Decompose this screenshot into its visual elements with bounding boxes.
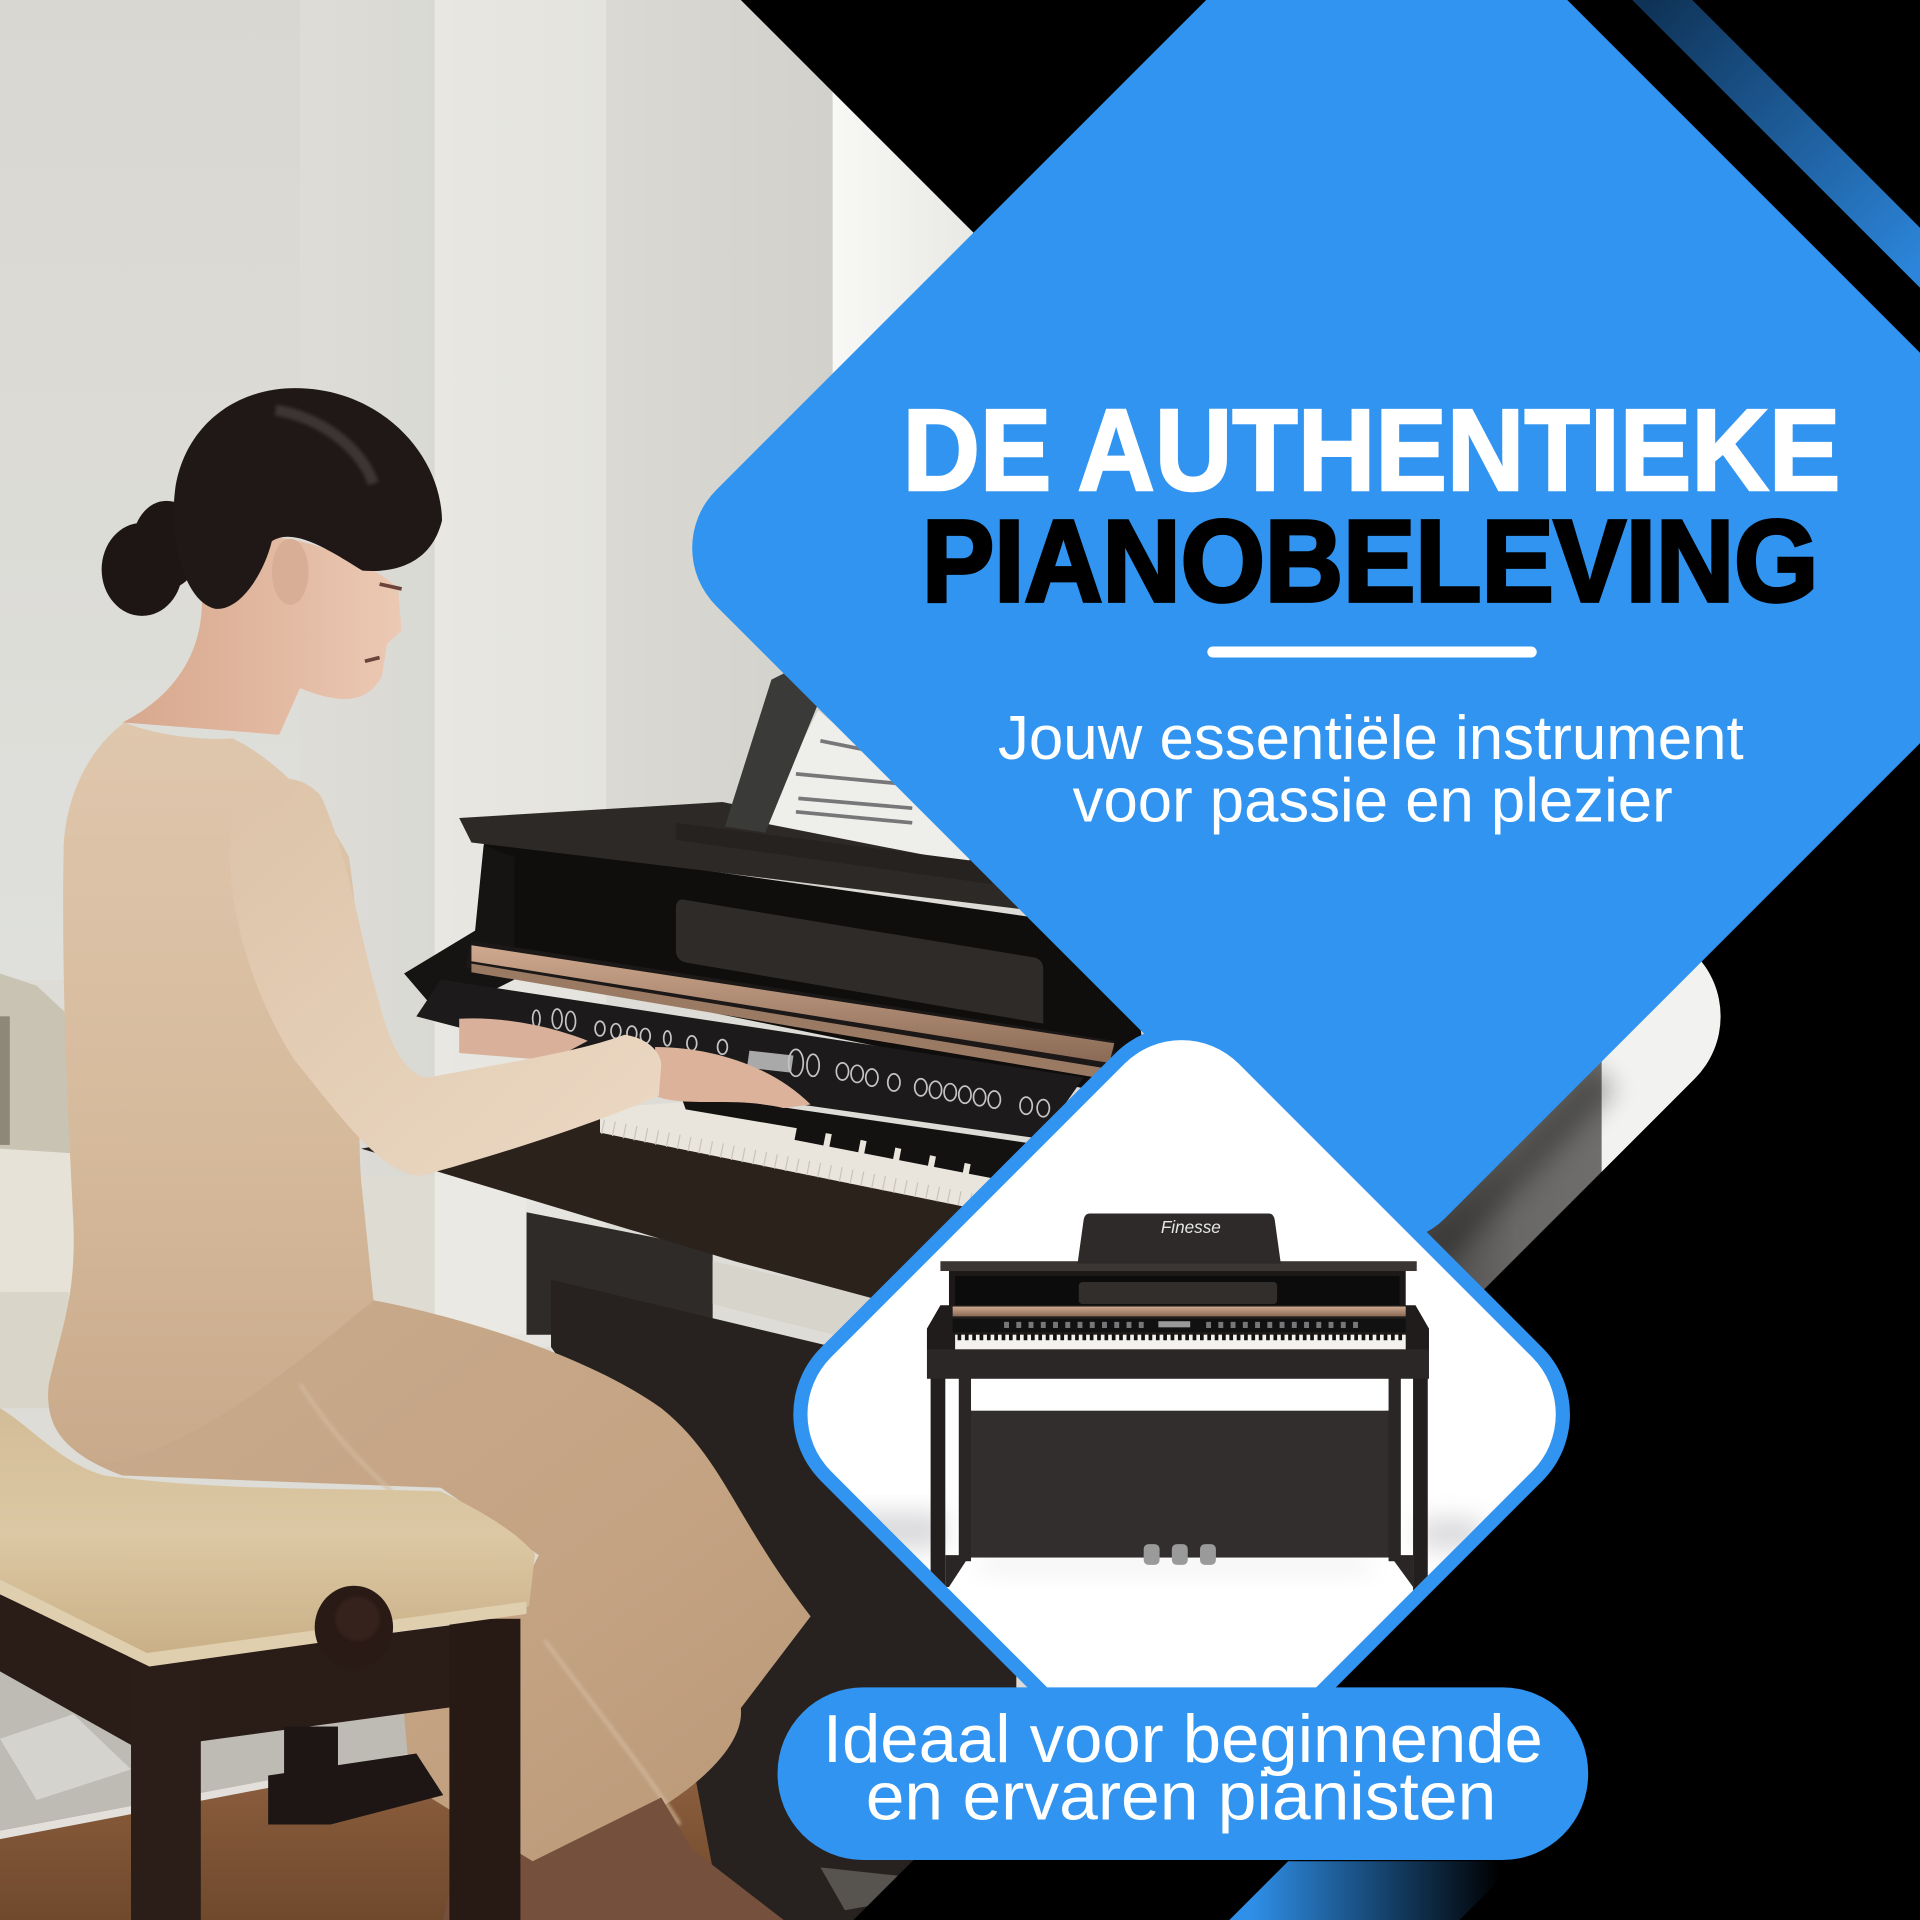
callout text [823,1702,1543,1835]
piano legs and back panel [931,1378,1428,1592]
piano upper body [404,802,1151,1102]
piano lower body [361,1108,1016,1920]
subtitle: Jouw essentiële instrument [998,703,1744,773]
top-right gradient stripe [1632,0,1920,288]
white backdrop [807,1040,1556,1688]
subtitle [998,703,1744,836]
product diamond frame [754,987,1609,1842]
black background shape [741,0,1920,1920]
piano keyboard section [927,1305,1429,1379]
piano pedals [1144,1544,1216,1565]
title: PIANOBELEVING [922,496,1818,626]
piano control panel [416,980,1084,1139]
subtitle: voor passie en plezier [1073,766,1673,836]
title [902,385,1840,626]
wall behind piano on the lower right [1427,931,1736,1322]
blue diamond panel [658,0,1920,1276]
bottom pill callout [778,1687,1588,1860]
woman's hands [459,1018,811,1108]
piano bench [0,1408,535,1920]
woman's sweater sleeve [230,779,661,1176]
woman's bare legs [443,1798,784,1920]
woman's lower dress [48,1293,811,1861]
sofa [0,973,76,1408]
eye and lips [365,584,402,661]
soft floor shadow [845,1512,1482,1570]
woman's upper body [48,722,373,1463]
bottom gradient stripe [1229,1861,1518,1920]
floor and carpet [0,1647,882,1920]
callout text: Ideaal voor beginnende [823,1702,1543,1777]
skirt fold highlights [282,1298,680,1824]
title: DE AUTHENTIEKE [902,385,1840,515]
woman's ear [272,539,309,605]
music stand and sheet music [676,673,992,884]
hair highlight [276,410,373,484]
piano upper body [940,1213,1417,1308]
woman's skin: face and neck [122,538,402,735]
callout text: en ervaren pianisten [866,1760,1496,1835]
product image: digital piano on white [807,1040,1556,1688]
piano keyboard [600,1092,1041,1210]
divider line [1207,647,1537,658]
woman's hair [174,388,442,609]
shadow of the blue diamond [1427,1065,1616,1273]
woman's bun [102,501,201,616]
piano upper body: Finesse [1161,1217,1221,1237]
